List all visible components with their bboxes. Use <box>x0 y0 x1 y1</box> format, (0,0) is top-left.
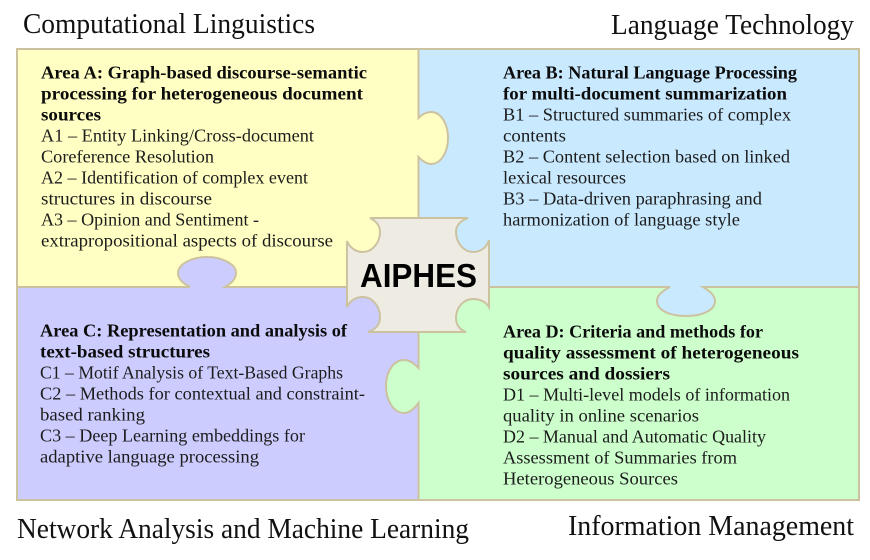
center puzzle piece: AIPHES <box>347 218 489 332</box>
text block: Area A: A1 – Entity Linking/Cross-document <box>41 126 314 146</box>
text block: Area C: text-based structures <box>40 342 210 362</box>
heading: Information Management: Information Management <box>568 511 854 542</box>
text block: Area D: D2 – Manual and Automatic Quality <box>503 427 766 447</box>
label: AIPHES: AIPHES <box>360 257 477 294</box>
text block: Area D: Heterogeneous Sources <box>503 469 678 489</box>
text block: Area C: based ranking <box>40 405 145 425</box>
text block: Area B: Area B: Natural Language Processing <box>503 63 797 83</box>
text block: Area B <box>503 63 797 230</box>
text block: Area D <box>503 322 799 489</box>
text block: Area D: D1 – Multi-level models of information <box>503 385 790 405</box>
panel: Area B blue puzzle piece <box>418 49 859 316</box>
text block: Area A <box>41 63 367 251</box>
text block: Area A: A2 – Identification of complex event <box>41 168 308 188</box>
text block: Area C <box>40 321 365 467</box>
text block: Area D: Area D: Criteria and methods for <box>503 322 763 342</box>
panel: Area D green puzzle piece <box>386 287 859 500</box>
heading: Computational Linguistics: Computational Linguistics <box>23 9 315 40</box>
text block: Area B: for multi-document summarization <box>503 84 787 104</box>
text block: Area D: quality assessment of heterogeneous <box>503 343 799 363</box>
text block: Area A: extrapropositional aspects of discourse <box>41 231 333 251</box>
text block: Area C: adaptive language processing <box>40 447 259 467</box>
text block: Area C: Area C: Representation and analysis of <box>40 321 348 341</box>
panel: Area C lilac puzzle piece <box>17 257 418 500</box>
text block: Area A: Area A: Graph-based discourse-semantic <box>41 63 367 83</box>
text block: Area A: processing for heterogeneous document <box>41 84 363 104</box>
heading: Language Technology: Language Technology <box>611 10 854 41</box>
text block: Area A: sources <box>41 105 101 125</box>
text block: Area B: lexical resources <box>503 168 626 188</box>
text block: Area A: A3 – Opinion and Sentiment - <box>41 210 259 230</box>
text block: Area A: Coreference Resolution <box>41 147 214 167</box>
text block: Area B: B2 – Content selection based on linked <box>503 147 790 167</box>
text block: Area B: contents <box>503 126 566 146</box>
text block: Area D: sources and dossiers <box>503 364 670 384</box>
text block: Area D: Assessment of Summaries from <box>503 448 737 468</box>
text block: Area C: C2 – Methods for contextual and constraint- <box>40 384 365 404</box>
text block: Area B: B3 – Data-driven paraphrasing and <box>503 189 762 209</box>
text block: Area C: C3 – Deep Learning embeddings for <box>40 426 305 446</box>
heading: Network Analysis and Machine Learning: Network Analysis and Machine Learning <box>17 514 469 545</box>
text block: Area B: B1 – Structured summaries of complex <box>503 105 791 125</box>
puzzle outlines <box>17 49 859 500</box>
text block: Area A: structures in discourse <box>41 189 212 209</box>
panel: Area A yellow puzzle piece <box>17 49 448 287</box>
text block: Area D: quality in online scenarios <box>503 406 699 426</box>
text block: Area B: harmonization of language style <box>503 210 740 230</box>
text block: Area C: C1 – Motif Analysis of Text-Based Graphs <box>40 363 343 383</box>
